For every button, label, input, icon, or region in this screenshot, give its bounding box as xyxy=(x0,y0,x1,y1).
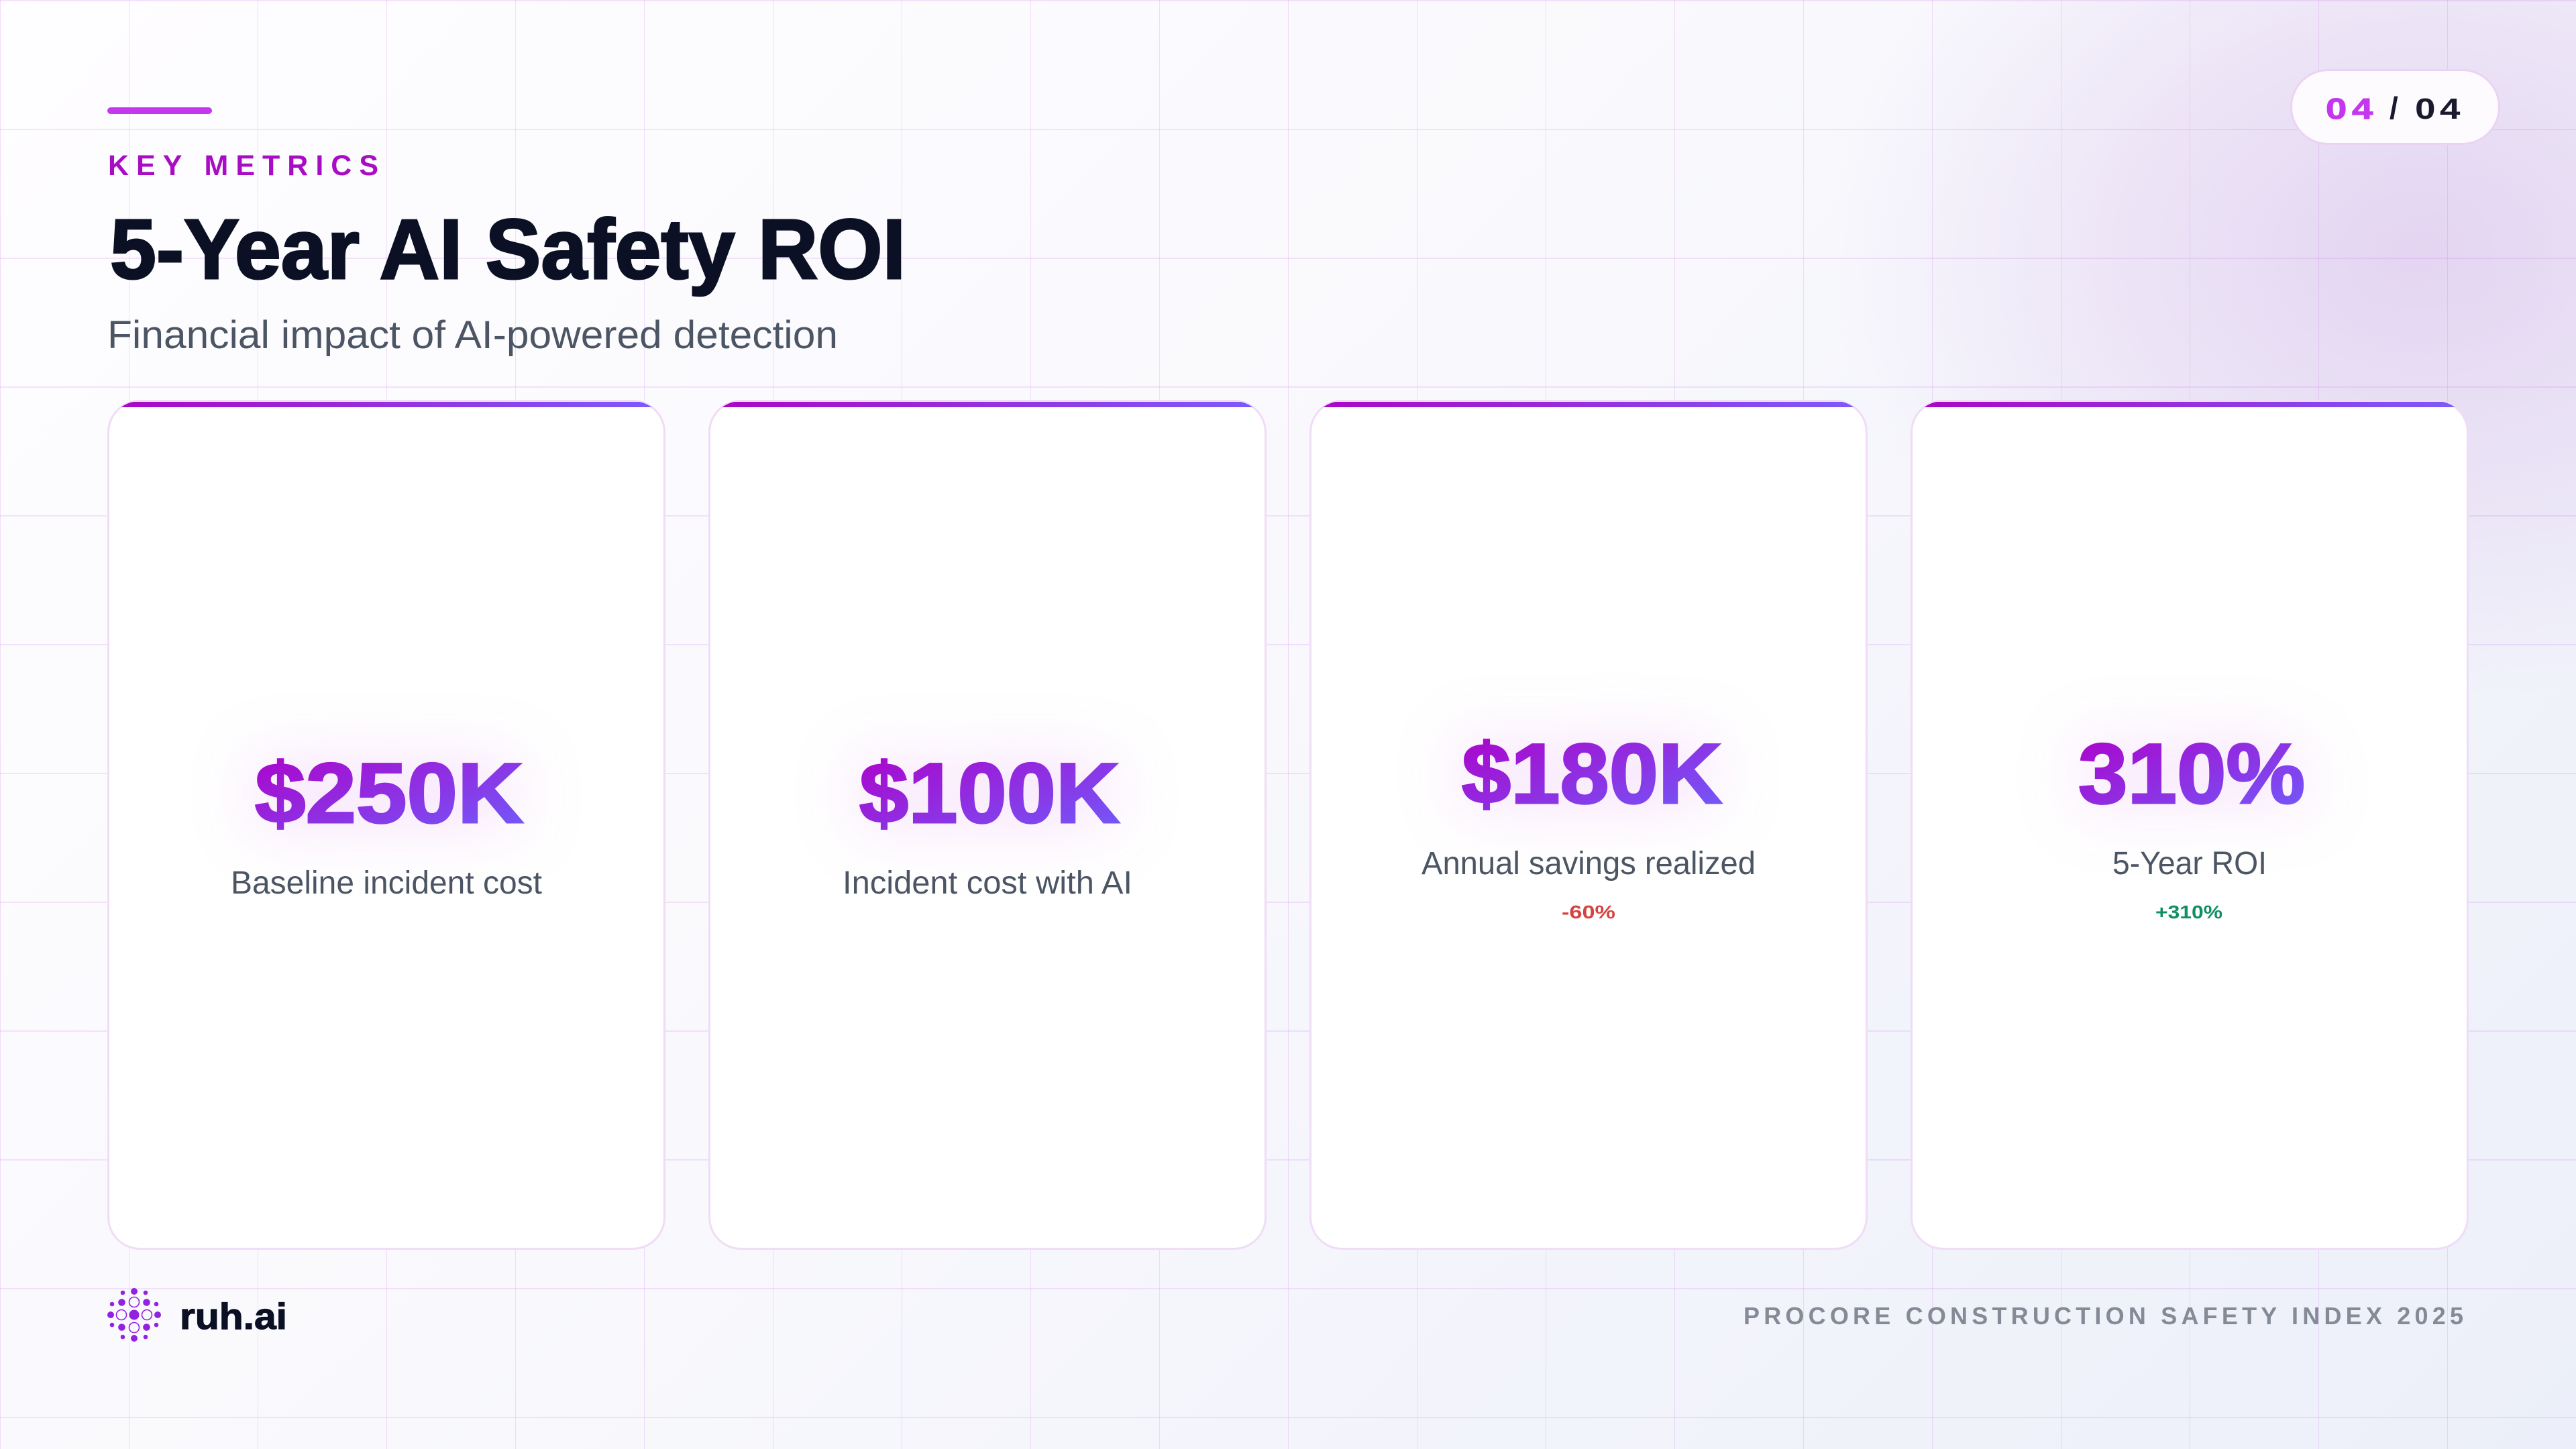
eyebrow: key metrics: KEY METRICS xyxy=(108,150,378,182)
value: $250K xyxy=(255,745,523,841)
value: $180K xyxy=(1462,726,1722,821)
panel: incident cost with AI xyxy=(710,401,1265,1249)
delta: +310% xyxy=(2155,902,2222,922)
page indicator pill xyxy=(2292,70,2500,144)
subtitle: Financial impact of AI-powered detection xyxy=(107,313,838,357)
accent bar xyxy=(107,107,212,114)
delta: -60% xyxy=(1562,902,1615,922)
brand logo xyxy=(107,1288,287,1342)
top gradient bar xyxy=(710,402,1265,407)
icon: dot mark xyxy=(107,1288,161,1342)
total pages: 04 xyxy=(2415,92,2461,125)
label: Baseline incident cost xyxy=(231,865,542,901)
wordmark: ruh.ai xyxy=(180,1295,287,1337)
label: 5-Year ROI xyxy=(2112,846,2267,881)
footer source: PROCORE CONSTRUCTION SAFETY INDEX 2025 xyxy=(1743,1302,2463,1330)
label: Incident cost with AI xyxy=(843,865,1132,901)
label: Annual savings realized xyxy=(1421,846,1756,881)
header block xyxy=(107,107,906,357)
title: 5-Year AI Safety ROI xyxy=(110,202,906,297)
panel: annual savings realized xyxy=(1311,401,1866,1249)
top gradient bar xyxy=(109,402,664,407)
top gradient bar xyxy=(1912,402,2467,407)
page separator: / xyxy=(2390,91,2398,125)
panel: baseline incident cost xyxy=(109,401,664,1249)
top gradient bar xyxy=(1311,402,1866,407)
value: $100K xyxy=(859,745,1120,841)
current page number: 04 xyxy=(2326,92,2373,125)
value: 310% xyxy=(2078,726,2305,821)
panel: 5-year ROI xyxy=(1912,401,2467,1249)
